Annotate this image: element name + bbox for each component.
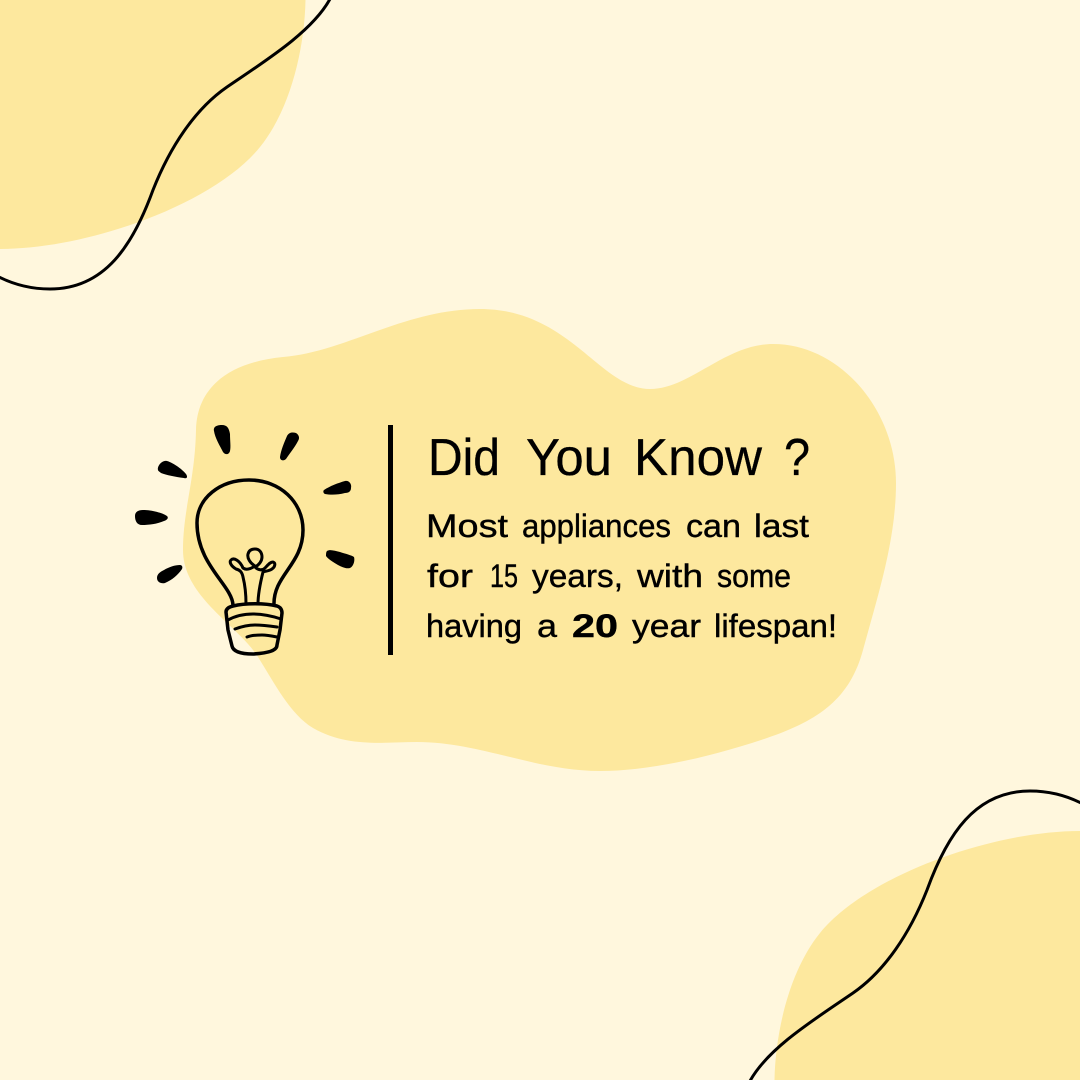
- heading: ?: [784, 429, 810, 487]
- body text: 20: [572, 608, 618, 644]
- top-left corner line: [0, 0, 330, 289]
- bottom-right corner line: [750, 791, 1080, 1080]
- body text: appliances: [522, 508, 671, 544]
- heading: You: [526, 429, 612, 487]
- body text: some: [717, 558, 791, 594]
- body text: years,: [532, 558, 623, 594]
- body text: having: [426, 608, 522, 644]
- body text: last: [754, 508, 809, 544]
- bottom-right corner blob: [774, 831, 1080, 1080]
- bulb base: [226, 604, 282, 654]
- body text: can: [686, 508, 741, 544]
- icon: light bulb: [135, 425, 354, 654]
- bulb base threads: [228, 614, 281, 637]
- body text: with: [636, 558, 703, 594]
- heading: Did: [428, 429, 500, 487]
- body text: Most: [426, 508, 508, 544]
- body text: lifespan!: [714, 608, 837, 644]
- divider: [388, 425, 393, 655]
- bulb rays: [135, 425, 354, 583]
- body text: a: [537, 608, 557, 644]
- bulb filament: [230, 549, 275, 604]
- body text: year: [632, 608, 701, 644]
- body text: 15: [490, 558, 518, 594]
- body text: [426, 508, 837, 644]
- body text: for: [427, 558, 473, 594]
- central blob: [183, 309, 896, 771]
- top-left corner blob: [0, 0, 306, 249]
- heading: Know: [634, 429, 762, 487]
- bulb glass: [197, 480, 303, 605]
